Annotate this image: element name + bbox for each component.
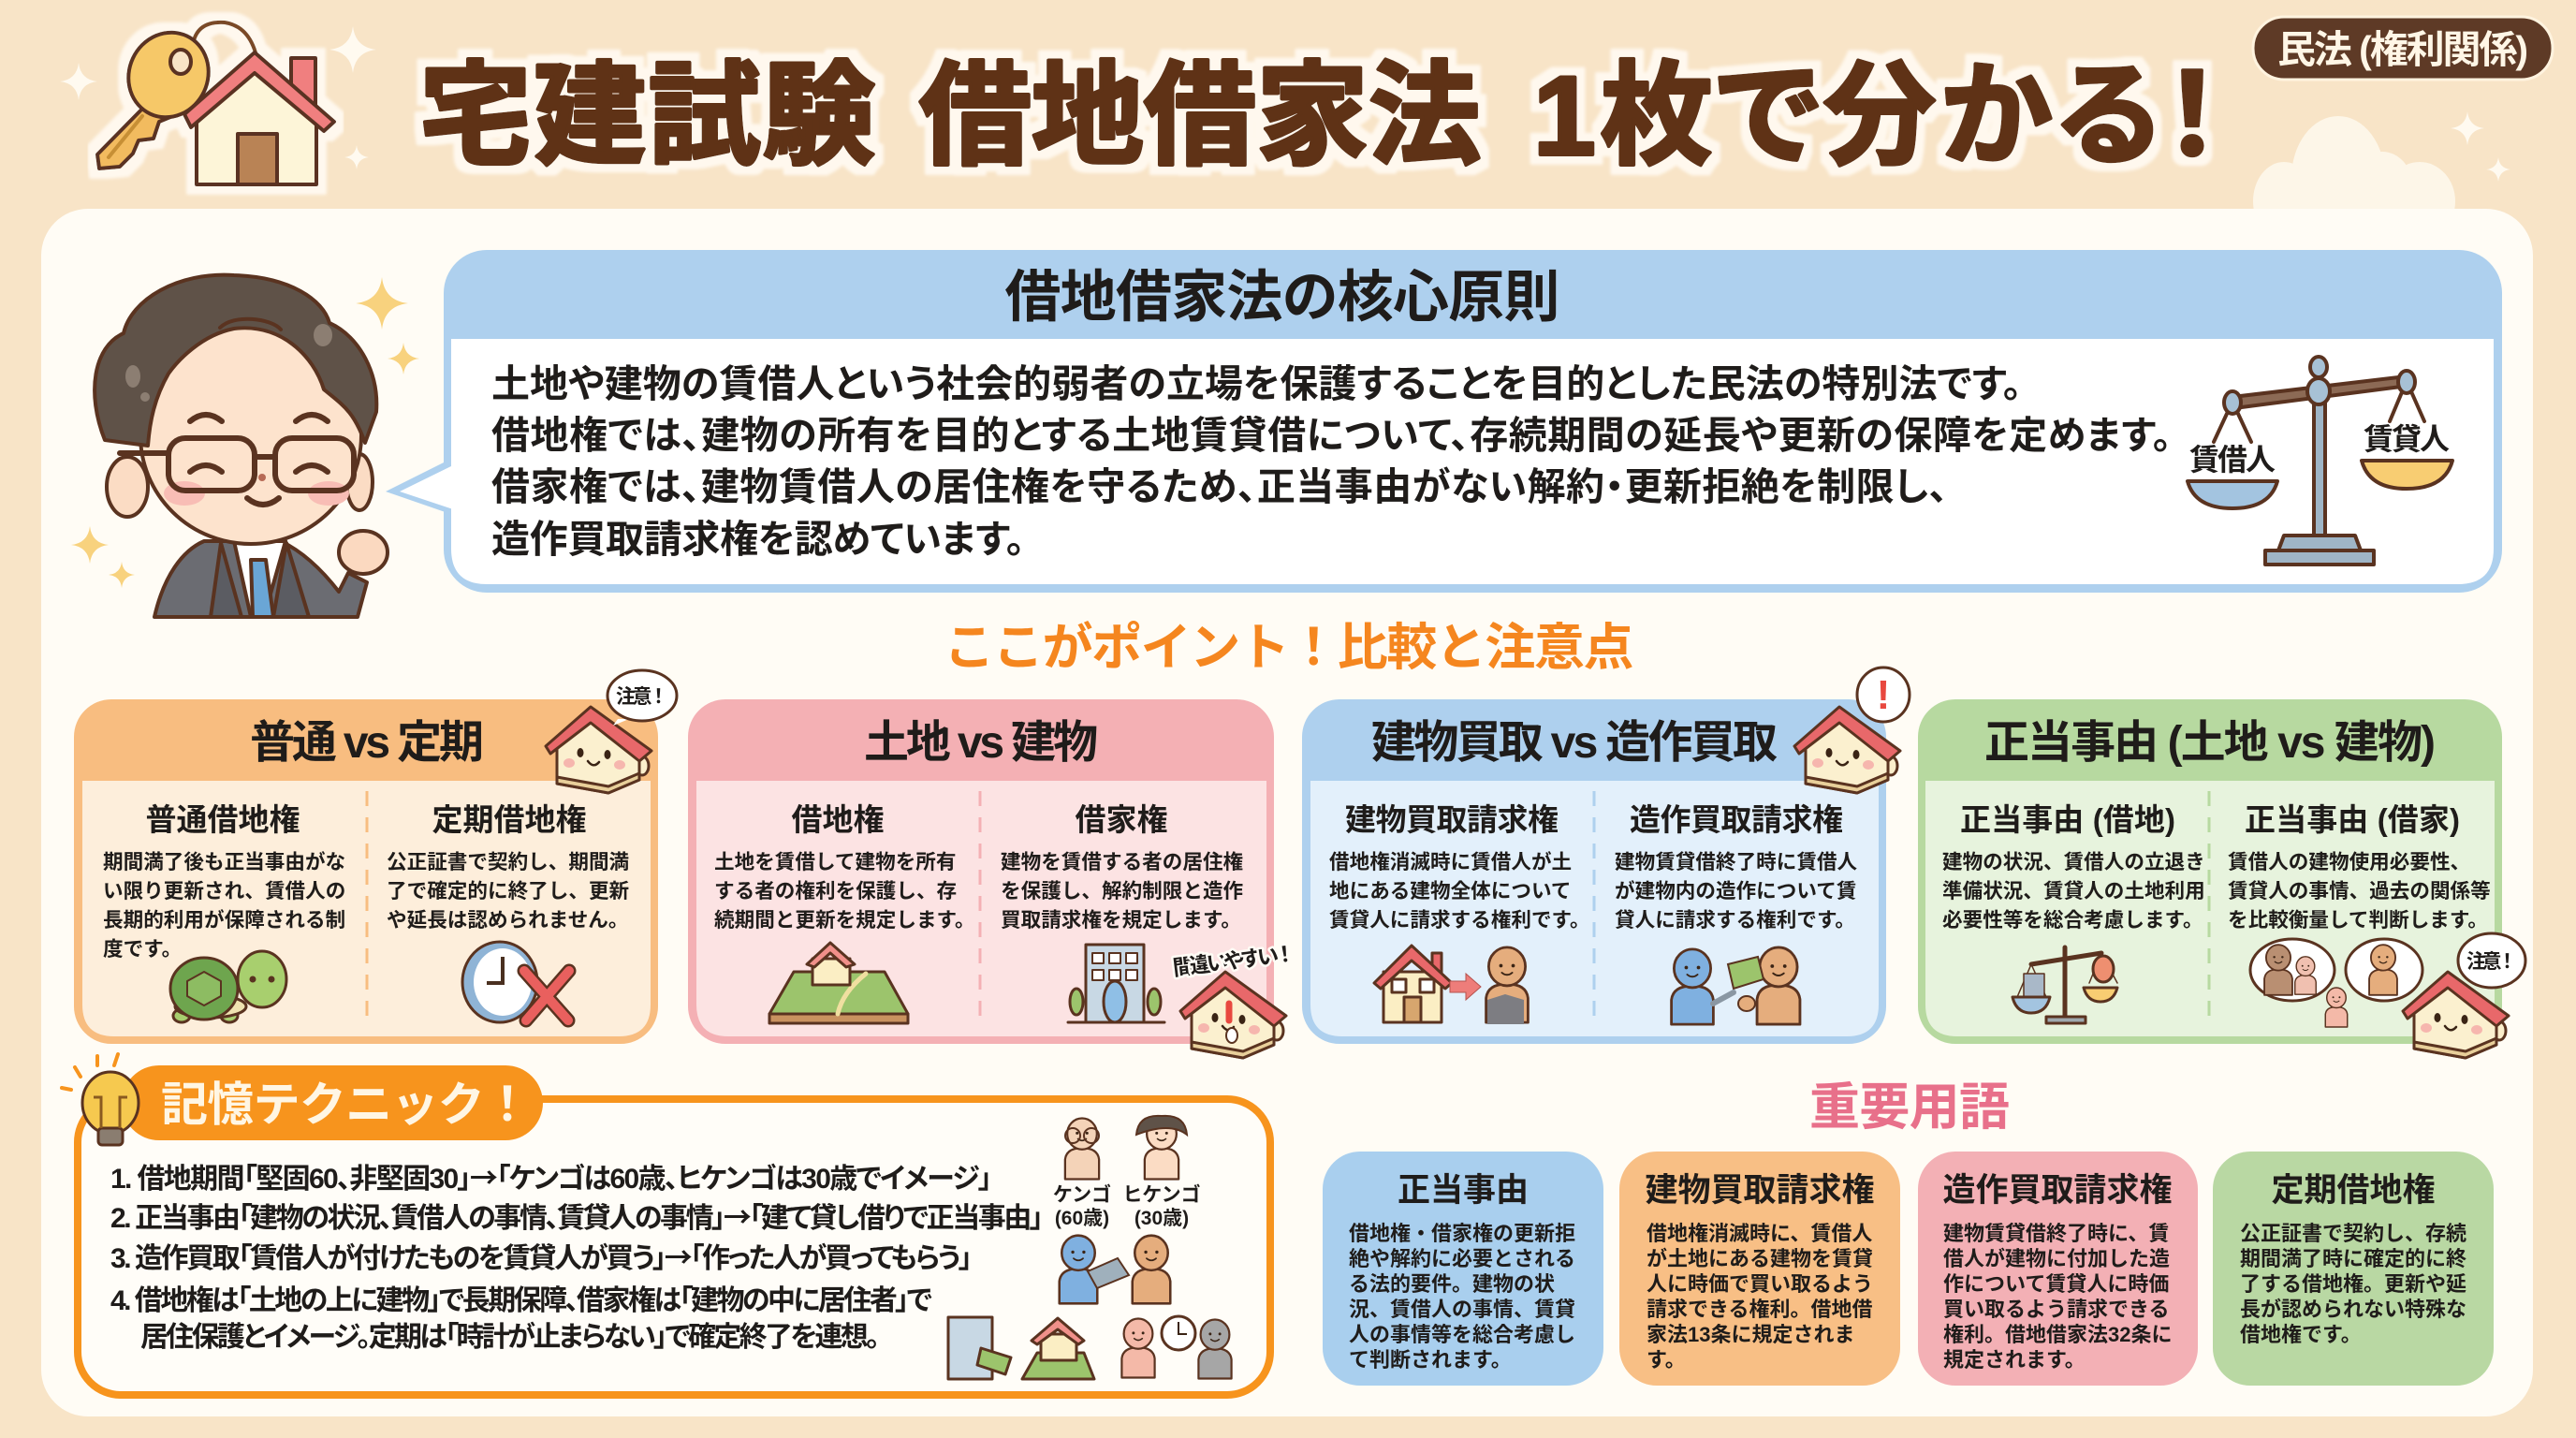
text: land legitimate reason: 必要性等を総合考慮します。 [1942,908,2203,932]
mascot: caution, green card [2403,972,2509,1058]
card: legitimate reason term: て判断されます。 [1349,1348,1512,1372]
text: regular term: い限り更新され、賃借人の [103,879,345,902]
text: building legitimate reason: を比較衡量して判断します。 [2228,908,2488,932]
panel: regular vs fixed term: 普通借地権 [146,802,300,837]
panel: land vs building: 借家権 [1075,802,1168,837]
panel: land vs building [688,699,1274,1044]
card: fixtures purchase term: 建物賃貸借終了時に、賃 [1943,1222,2169,1245]
mascot: caution, orange card [546,707,651,793]
text: memory items: 居住保護とイメージ。定期は「時計が止まらない」で確定終了を連想。 [140,1321,880,1353]
text: memory items: 1. 借地期間「堅固60、非堅固30」→「ケンゴは60歳、ヒケンゴは30歳でイメージ」 [110,1155,992,1196]
panel: building vs fixtures purchase: 建物買取 vs 造作買取 [1371,718,1778,768]
text: memory items: 3. 造作買取「賃借人が付けたものを賃貸人が買う」→「作った人が買ってもらう」 [110,1235,973,1276]
card: building purchase term: す。 [1647,1348,1686,1372]
icon: kengo and hikengo: (30歳) [1134,1208,1189,1229]
heading: core principle: 借地借家法の核心原則 [1005,266,1559,329]
panel: legitimate reason [1918,699,2502,1044]
icon: light bulb [62,1054,139,1145]
icon: balance scale [2188,357,2452,565]
card: fixed term lease term: 公正証書で契約し、存続 [2240,1222,2466,1245]
card: legitimate reason term: 正当事由 [1398,1172,1529,1209]
panel: land vs building: 土地 vs 建物 [864,718,1098,768]
text: regular term: 度です。 [103,937,182,961]
card: fixtures purchase term: 買い取るよう請求できる [1943,1298,2170,1321]
panel: legitimate reason: 正当事由 (借地) [1960,802,2175,837]
heading: memory techniques: 記憶テクニック！ [161,1078,531,1131]
text: core principle body: 借地権では、建物の所有を目的とする土地賃貸借について、存続期間の延長や更新の保障を定めます。 [491,414,2172,457]
panel: regular vs fixed term: 定期借地権 [432,802,586,837]
callout: caution: 注意！ [616,686,668,708]
heading: key terms: 重要用語 [1809,1079,2010,1136]
text: building lease: 建物を賃借する者の居住権 [1001,850,1243,873]
card: building purchase term: 建物買取請求権 [1645,1172,1875,1209]
badge: category [2253,17,2553,80]
icon: turtle [170,951,286,1022]
text: core principle body [491,362,2172,561]
callout: exclamation: ! [1877,672,1890,718]
text: building legitimate reason: 賃借人の建物使用必要性、 [2228,850,2470,873]
card: legitimate reason term: 況、賃借人の事情、賃貸 [1349,1298,1575,1321]
callout: exclamation [1857,668,1910,722]
icon: small scale [2012,947,2117,1023]
card: fixtures purchase term: 権利。借地借家法32条に [1943,1323,2172,1346]
text: core principle body: 造作買取請求権を認めています。 [491,518,1025,561]
callout: caution [2458,933,2525,988]
panel: building vs fixtures purchase [1302,699,1886,1044]
title [419,53,2220,179]
text: regular term: 長期的利用が保障される制 [103,908,345,932]
card: legitimate reason term [1323,1152,1603,1386]
icon: key and house [97,20,334,184]
panel: legitimate reason: 正当事由 (借家) [2245,802,2460,837]
card: building purchase term [1619,1152,1900,1386]
panel: memory techniques [62,1054,1270,1395]
text: fixed term: 公正証書で契約し、期間満 [387,850,629,873]
panel: regular vs fixed term: 普通 vs 定期 [250,718,484,768]
text: building legitimate reason: 賃貸人の事情、過去の関係等 [2228,879,2491,902]
icon: balance scale: 賃借人 [2189,443,2276,477]
card: legitimate reason term: 絶や解約に必要とされる [1349,1247,1575,1270]
icon: sparkles in header [60,26,2510,182]
text: fixtures purchase: 建物賃貸借終了時に賃借人 [1615,850,1858,873]
text: memory items: 2. 正当事由「建物の状況、賃借人の事情、賃貸人の事情」→「建て貸し借りで正当事由」 [110,1195,1044,1236]
text: core principle body: 借家権では、建物賃借人の居住権を守るため、正当事由がない解約・更新拒絶を制限し、 [491,465,1948,508]
character: teacher [95,275,388,617]
panel: building vs fixtures purchase: 造作買取請求権 [1630,802,1843,837]
card: building purchase term: 家法13条に規定されま [1647,1323,1854,1346]
text: building purchase: 借地権消滅時に賃借人が土 [1329,850,1572,873]
panel: regular vs fixed term [74,699,658,1044]
text: regular term: 期間満了後も正当事由がな [103,850,345,873]
card: fixtures purchase term: 借人が建物に付加した造 [1943,1247,2170,1270]
icon: building, land, woman, clock, person [948,1316,1232,1379]
panel: core principle callout [386,250,2502,593]
card: fixed term lease term: 借地権です。 [2240,1323,2362,1346]
text: land lease: 続期間と更新を規定します。 [714,908,975,932]
panel: building vs fixtures purchase: 建物買取請求権 [1345,802,1559,837]
text: land legitimate reason: 準備状況、賃貸人の土地利用 [1942,879,2205,902]
card: building purchase term: が土地にある建物を賃貸 [1647,1247,1873,1270]
callout: caution [607,670,677,726]
panel: land vs building: 借地権 [792,802,884,837]
icon: apartment building [1068,945,1164,1022]
title: 宅建試験 [419,53,875,179]
callout: easy to mistake: 間違いやすい！ [1171,941,1297,980]
title: 1枚で分かる！ [1533,53,2220,179]
card: fixed term lease term: 長が認められない特殊な [2240,1298,2466,1321]
card: fixed term lease term: 定期借地権 [2271,1172,2436,1209]
text: building purchase: 賃貸人に請求する権利です。 [1329,908,1590,932]
text: land lease: 土地を賃借して建物を所有 [714,850,956,873]
text: fixtures purchase: 貸人に請求する権利です。 [1615,908,1855,932]
text: memory items [110,1155,1044,1353]
icon: house to person [1374,946,1528,1024]
badge: category: 民法 (権利関係) [2277,28,2528,71]
mascot: easy to mistake [1180,972,1286,1058]
card: legitimate reason term: 借地権・借家権の更新拒 [1349,1222,1575,1245]
title: 借地借家法 [919,53,1481,179]
text: building purchase: 地にある建物全体について [1329,879,1571,902]
icon: kengo and hikengo: ヒケンゴ [1122,1183,1201,1206]
text: core principle body: 土地や建物の賃借人という社会的弱者の立場を保護することを目的とした民法の特別法です。 [491,362,2022,405]
text: building lease: を保護し、解約制限と造作 [1001,879,1243,902]
icon: kengo and hikengo: ケンゴ [1053,1183,1111,1206]
card: fixed term lease term [2213,1152,2494,1386]
icon: land with house [769,943,908,1023]
card: building purchase term: 借地権消滅時に、賃借人 [1647,1222,1872,1245]
panel: legitimate reason: 正当事由 (土地 vs 建物) [1984,718,2436,768]
icon: kengo and hikengo [1053,1116,1201,1229]
text: land legitimate reason: 建物の状況、賃借人の立退き [1942,850,2205,873]
icon: tenant and landlord exchange [1672,947,1800,1024]
text: fixed term: 了で確定的に終了し、更新 [387,879,629,902]
text: building lease: 買取請求権を規定します。 [1001,908,1241,932]
icon: thought bubbles [2250,939,2422,1027]
text: land lease: する者の権利を保護し、存 [714,879,957,902]
card: fixtures purchase term [1918,1152,2198,1386]
text: fixtures purchase: が建物内の造作について賃 [1615,879,1856,902]
card: fixtures purchase term: 作について賃貸人に時価 [1943,1272,2169,1296]
card: fixtures purchase term: 造作買取請求権 [1942,1172,2173,1209]
icon: clock with cross [462,942,569,1022]
callout: caution: 注意！ [2466,951,2517,973]
text: memory items: 4. 借地権は「土地の上に建物」で長期保障、借家権は「建物の中に居住者」で [110,1285,932,1316]
card: building purchase term: 請求できる権利。借地借 [1647,1298,1873,1321]
card: fixed term lease term: 了する借地権。更新や延 [2240,1272,2466,1296]
heading: comparison points: ここがポイント！比較と注意点 [944,620,1634,676]
decorative cloud [2253,116,2455,241]
heading: memory techniques [122,1065,543,1140]
card: building purchase term: 人に時価で買い取るよう [1647,1272,1873,1296]
text: fixed term: や延長は認められません。 [387,908,628,932]
icon: yellow sparkles [71,277,419,588]
icon: kengo and hikengo: (60歳) [1055,1208,1109,1229]
card: legitimate reason term: 人の事情等を総合考慮し [1349,1323,1575,1346]
card: legitimate reason term: る法的要件。建物の状 [1349,1272,1555,1296]
icon: fixture handover [1060,1236,1170,1303]
icon: balance scale: 賃貸人 [2364,422,2450,456]
mascot: caution, blue card [1794,707,1900,793]
card: fixtures purchase term: 規定されます。 [1943,1348,2086,1372]
card: fixed term lease term: 期間満了時に確定的に終 [2240,1247,2466,1270]
